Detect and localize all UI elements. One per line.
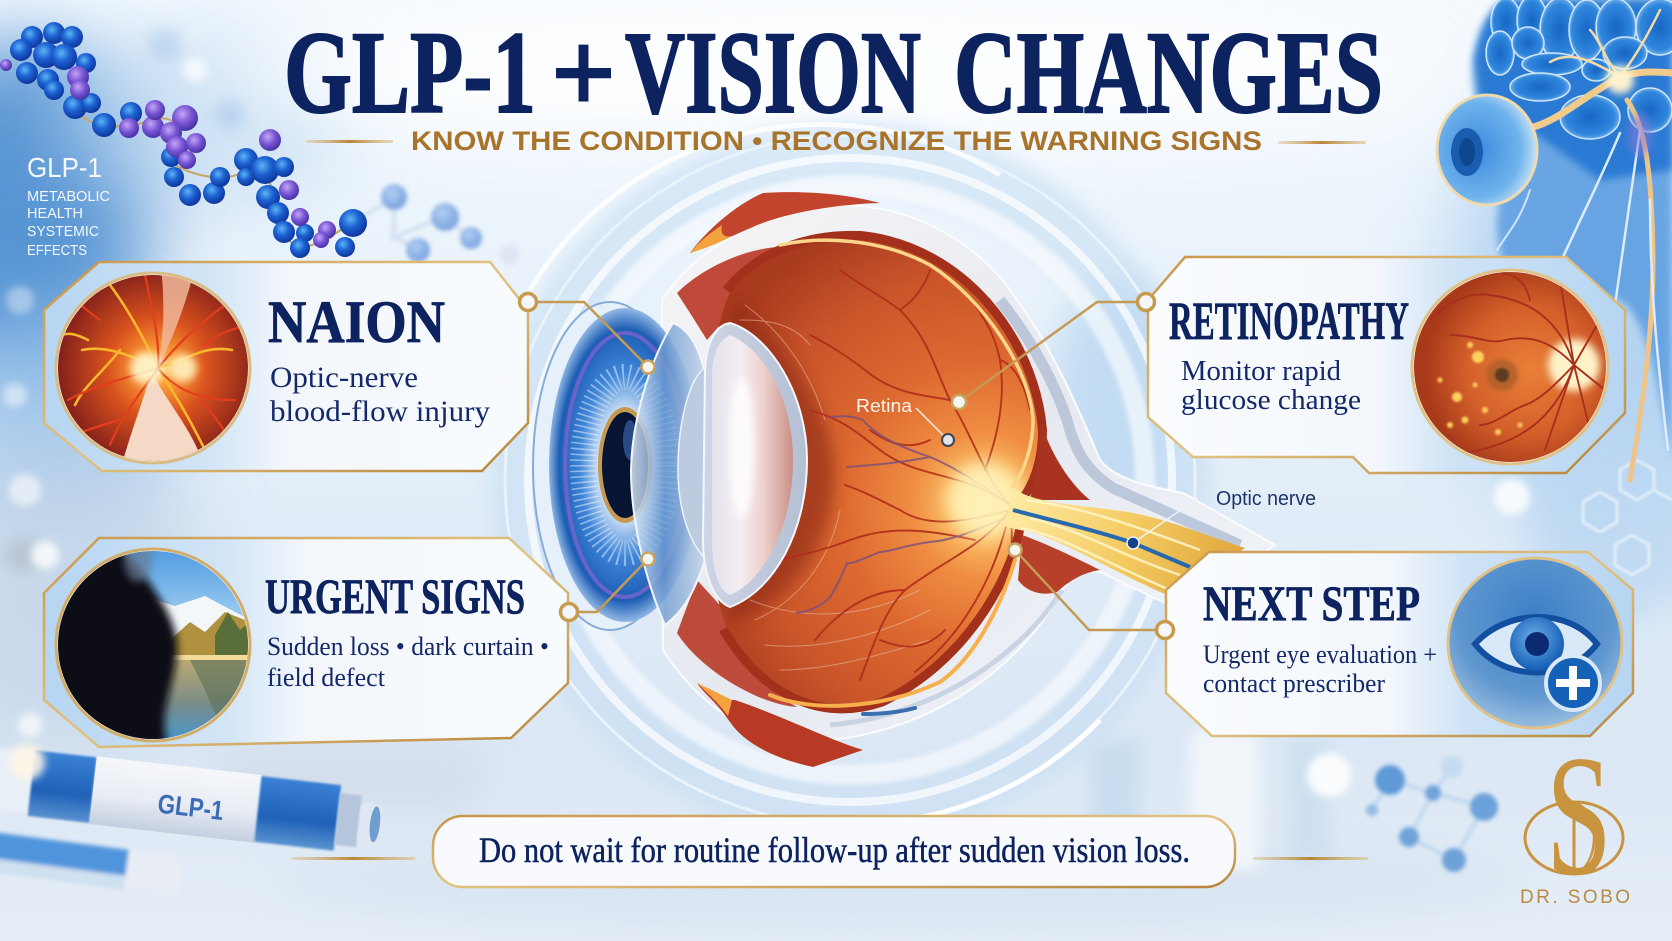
- crystalline lens: [703, 323, 807, 607]
- logo: Dr. Sobo: DR. SOBO: [1520, 887, 1630, 908]
- monogram: S: [1546, 721, 1612, 911]
- GLP-1 side note: [27, 152, 110, 259]
- GLP-1 side note: EFFECTS: [27, 242, 87, 259]
- title: [284, 7, 1383, 138]
- pen: front: GLP-1: [156, 789, 225, 826]
- upper red muscle leaf: [690, 192, 880, 253]
- title: CHANGES: [954, 7, 1383, 138]
- image: vision curtain: [54, 548, 252, 742]
- panel: retinopathy: glucose change: [1181, 385, 1361, 416]
- label: retina: Retina: [856, 396, 913, 416]
- pen: rear: [0, 830, 183, 897]
- blurred pale molecule: [353, 184, 520, 265]
- GLP-1 side note: SYSTEMIC: [27, 223, 99, 240]
- title: VISION: [625, 7, 921, 138]
- lattice above nerve: [1030, 425, 1090, 500]
- panel: NAION: Optic-nerve: [270, 361, 418, 394]
- panel: urgent signs: URGENT SIGNS: [265, 568, 525, 624]
- label: optic nerve: Optic nerve: [1216, 488, 1316, 510]
- eye anatomy cross-section: [533, 192, 1275, 767]
- inner grey lens layer: [678, 367, 707, 560]
- molecule chain: [0, 22, 520, 265]
- panel: NAION: NAION: [268, 289, 445, 355]
- logo: Dr. Sobo: [1520, 721, 1630, 911]
- pen: front: [0, 744, 385, 857]
- panel: NAION: blood-flow injury: [270, 395, 490, 428]
- upper leaf highlight: [690, 225, 732, 253]
- iris and cornea: [533, 302, 701, 630]
- retina globe: [707, 240, 1038, 704]
- retinal veins: [700, 270, 1030, 680]
- lower leaf highlight: [697, 683, 732, 716]
- panel: next step: Urgent eye evaluation +: [1203, 640, 1437, 669]
- panel: next step: [1156, 552, 1633, 736]
- panel: NAION: [44, 262, 536, 475]
- blurred molecule bottom right: [1366, 756, 1498, 872]
- sclera and optic sheath: [662, 205, 1275, 741]
- lattice below nerve: [1018, 535, 1100, 594]
- panel: urgent signs: field defect: [267, 663, 386, 692]
- icon: eye with medical plus: [1448, 558, 1622, 728]
- choroid band: [727, 240, 1038, 704]
- GLP-1 side note: HEALTH: [27, 205, 83, 222]
- subtitle: KNOW THE CONDITION • RECOGNIZE THE WARNING SIGNS: [411, 126, 1262, 156]
- image: retina fundus: [1410, 270, 1610, 465]
- callout banner: [292, 816, 1368, 887]
- nerve fibres: [1497, 10, 1672, 480]
- optic nerve: [1005, 487, 1245, 597]
- brain lobes: [1486, 0, 1672, 139]
- GLP-1 side note: GLP-1: [27, 152, 102, 183]
- panel: next step: contact prescriber: [1203, 669, 1385, 698]
- panel: urgent signs: Sudden loss • dark curtain •: [267, 632, 549, 661]
- lower inner muscle: [677, 580, 797, 707]
- sclera shading stripes: [683, 300, 1240, 725]
- monogram: [1525, 721, 1623, 911]
- upper inner muscle: [677, 247, 777, 340]
- glass layer: [631, 323, 705, 625]
- connectors and markers: [528, 302, 1198, 630]
- brain and eye illustration: [1437, 0, 1672, 480]
- GLP-1 pens: [0, 744, 385, 897]
- panel: urgent signs: [44, 538, 578, 748]
- title: +: [551, 7, 616, 138]
- callout banner: Do not wait for routine follow-up after sudden vision loss.: [479, 830, 1190, 870]
- panel: retinopathy: [1138, 257, 1625, 473]
- retina edge highlights: [770, 240, 1033, 714]
- GLP-1 side note: METABOLIC: [27, 188, 110, 205]
- panel: retinopathy: Monitor rapid: [1181, 356, 1341, 387]
- small blue eye: [1437, 95, 1537, 205]
- concentric HUD rings around eye: [505, 125, 1195, 825]
- title: GLP-1: [284, 7, 536, 138]
- image: optic nerve head: [54, 272, 252, 464]
- panel: retinopathy: RETINOPATHY: [1169, 291, 1409, 351]
- lower red leaf: [697, 683, 863, 767]
- panel: next step: NEXT STEP: [1203, 575, 1420, 631]
